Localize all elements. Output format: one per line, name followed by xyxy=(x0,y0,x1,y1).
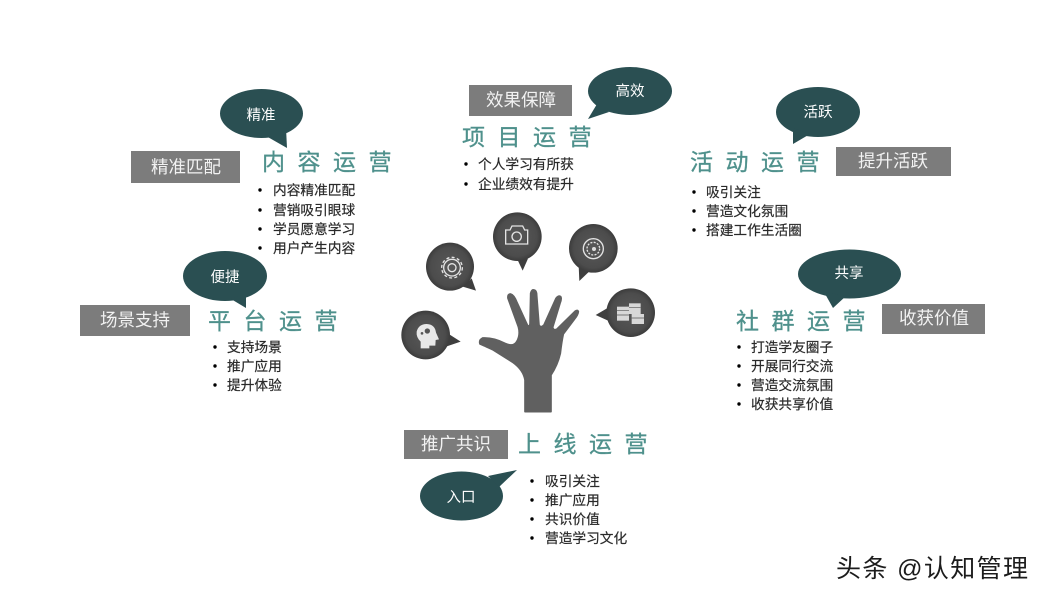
heading: 内容运营: 内容运营 xyxy=(262,149,404,175)
callout: 共享 xyxy=(798,250,901,308)
list: 社群运营: 收获共享价值 xyxy=(751,396,833,412)
callout: 精准 xyxy=(220,89,303,148)
list: 社群运营: 开展同行交流 xyxy=(751,358,833,374)
list: 上线运营: 吸引关注 xyxy=(545,474,600,489)
list: 项目运营 xyxy=(464,157,574,192)
list: 内容运营: 用户产生内容 xyxy=(273,240,355,256)
list: 社群运营: 营造交流氛围 xyxy=(751,377,833,393)
list: 平台运营 xyxy=(213,340,282,393)
list: 平台运营: 支持场景 xyxy=(227,340,282,355)
callout: 活跃 xyxy=(776,87,860,144)
label: 推广共识 xyxy=(404,430,508,459)
list: 社群运营 xyxy=(737,339,833,412)
list: 项目运营: 企业绩效有提升 xyxy=(478,176,574,192)
label: 效果保障 xyxy=(469,85,572,116)
list: 内容运营 xyxy=(258,182,355,256)
callout: 共享: 共享 xyxy=(834,265,864,282)
icon: camera xyxy=(493,212,542,271)
list: 上线运营 xyxy=(530,474,627,546)
list: 活动运营 xyxy=(692,185,802,238)
icon: coins xyxy=(596,288,655,337)
heading: 活动运营: 活动运营 xyxy=(690,149,832,175)
label: 收获价值 xyxy=(882,304,985,334)
list: 活动运营: 搭建工作生活圈 xyxy=(706,223,802,238)
list: 项目运营: 个人学习有所获 xyxy=(478,157,574,172)
list: 内容运营: 营销吸引眼球 xyxy=(273,203,355,218)
heading: 平台运营: 平台运营 xyxy=(208,308,350,334)
list: 活动运营: 营造文化氛围 xyxy=(706,204,788,219)
list: 平台运营: 提升体验 xyxy=(227,378,282,393)
label: 场景支持 xyxy=(80,305,190,336)
icon: gear xyxy=(426,243,476,291)
illustration: hand with icon bubbles xyxy=(401,212,655,412)
watermark: 头条 @认知管理 xyxy=(836,555,1028,583)
list: 活动运营: 吸引关注 xyxy=(706,185,761,200)
callout: 高效 xyxy=(588,67,672,119)
panel: 项目运营 xyxy=(462,67,672,192)
list: 内容运营: 内容精准匹配 xyxy=(273,182,355,198)
heading: 上线运营: 上线运营 xyxy=(518,431,660,457)
list: 上线运营: 推广应用 xyxy=(545,492,600,508)
callout: 入口 xyxy=(420,470,517,520)
icon: disc xyxy=(569,224,618,281)
callout: 便捷: 便捷 xyxy=(210,269,240,286)
hand xyxy=(480,290,578,412)
list: 上线运营: 营造学习文化 xyxy=(545,531,627,546)
list: 内容运营: 学员愿意学习 xyxy=(273,221,355,237)
label: 精准匹配 xyxy=(131,151,240,183)
label: 推广共识: 推广共识 xyxy=(421,434,491,454)
label: 提升活跃: 提升活跃 xyxy=(858,151,928,171)
list: 社群运营: 打造学友圈子 xyxy=(751,339,833,355)
label: 提升活跃 xyxy=(836,147,951,176)
panel: 平台运营 xyxy=(80,251,350,393)
heading: 项目运营: 项目运营 xyxy=(462,124,604,150)
label: 场景支持: 场景支持 xyxy=(100,310,170,330)
list: 上线运营: 共识价值 xyxy=(545,512,600,527)
label: 精准匹配: 精准匹配 xyxy=(151,157,221,177)
callout: 高效: 高效 xyxy=(616,83,645,100)
label: 收获价值: 收获价值 xyxy=(899,308,969,328)
label: 效果保障: 效果保障 xyxy=(486,90,556,110)
heading: 社群运营: 社群运营 xyxy=(736,308,878,334)
panel: 活动运营 xyxy=(690,87,951,238)
callout: 便捷 xyxy=(183,251,267,308)
callout: 活跃: 活跃 xyxy=(804,104,833,121)
list: 平台运营: 推广应用 xyxy=(227,358,282,374)
callout: 精准: 精准 xyxy=(246,107,276,124)
icon: head with gears xyxy=(401,311,461,359)
callout: 入口: 入口 xyxy=(446,490,476,506)
panel: 上线运营 xyxy=(404,430,660,546)
panel: 社群运营 xyxy=(736,250,985,412)
panel: 内容运营 xyxy=(131,89,404,256)
